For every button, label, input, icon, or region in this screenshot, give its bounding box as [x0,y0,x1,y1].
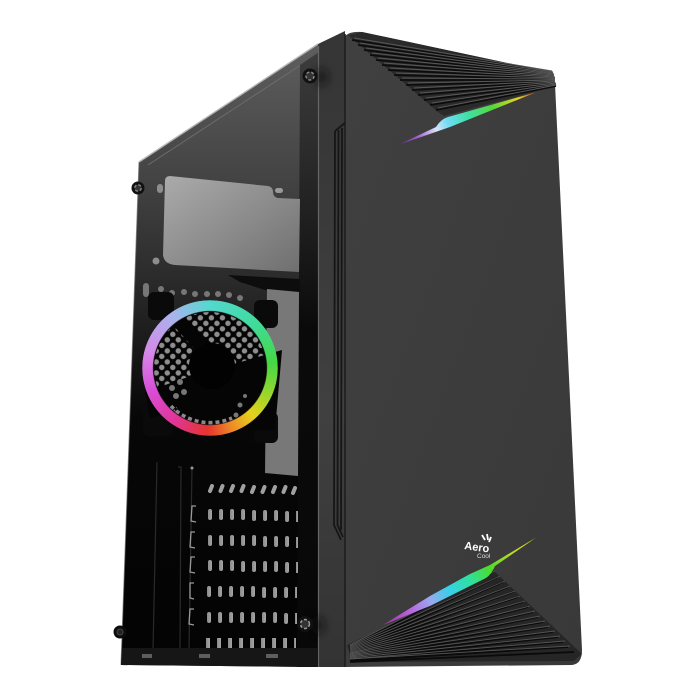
bottom grille ridges [350,572,574,662]
slanted slots row [210,486,295,493]
product: PC case [114,31,582,667]
base bar [121,648,318,667]
glass left edge [121,162,139,665]
glass base [121,44,318,667]
top grille highlights [354,38,556,108]
top RGB light strip [398,92,537,145]
rear ventilation slots [206,509,298,648]
glass inner line [148,55,316,165]
bottom grille [347,568,582,662]
bottom RGB light strip [383,537,537,625]
dark bracket under PSU [228,275,300,292]
perforated grille [154,312,266,424]
side vent [334,123,345,540]
screw shadows [311,68,329,634]
logo word Cool: Cool [477,553,491,560]
glass top edge highlight [139,44,318,162]
base cutouts [142,654,278,658]
right frame [297,52,319,667]
row of holes above fan [143,283,243,301]
screw left [132,182,144,194]
logo word Aero: Aero [464,540,490,555]
screw bottom right [297,616,313,632]
PSU holes [152,184,163,264]
AeroCool logo [464,534,491,560]
PSU bracket [163,176,300,272]
screws [114,68,318,638]
screw top right [302,68,318,84]
PSU notch [275,188,283,193]
RGB fan ring [142,300,278,436]
screw bottom left [114,626,126,638]
logo fan mark [482,534,491,542]
top grille [348,32,556,116]
top grille ridges [352,40,556,110]
frame highlight [318,46,320,667]
panel seam [344,34,346,667]
side glass panel [121,44,319,667]
lower-right blade perforations [169,379,247,418]
front panel [345,32,582,667]
expansion slot brackets [153,462,192,650]
bottom grille highlights [350,571,570,659]
bottom grille ticks [171,406,232,423]
fan hub [189,343,235,389]
fan grille [145,310,282,432]
fan black disc [152,310,268,426]
rear gray plate [265,289,299,476]
top grille base [348,32,556,116]
side strip [318,31,345,667]
fan blades covering the grille [145,314,282,432]
expansion slot tabs [189,506,196,625]
fan corners [143,292,278,443]
bottom grille base [347,568,582,662]
